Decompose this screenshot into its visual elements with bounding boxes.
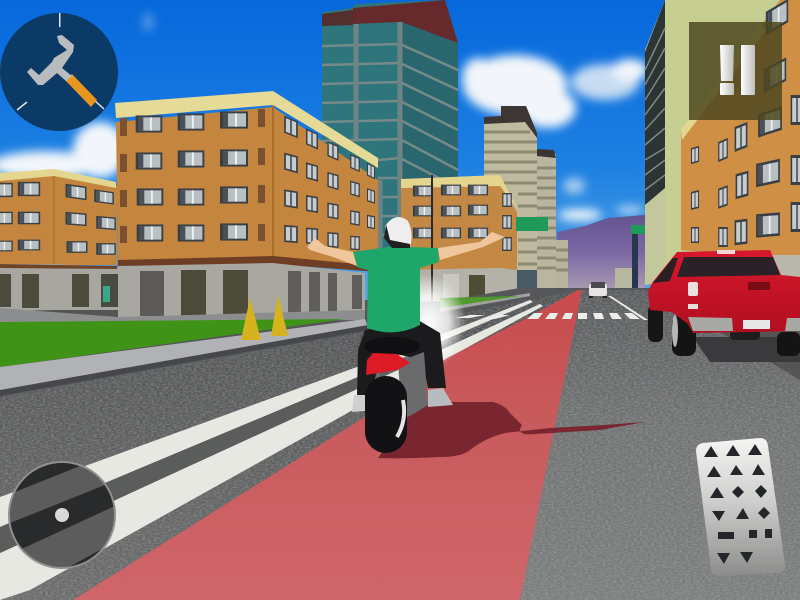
glass tower bbox=[322, 0, 458, 255]
sidewalk bbox=[0, 319, 368, 392]
grass lawn bbox=[0, 319, 345, 367]
road right bbox=[520, 290, 800, 600]
bike frame bbox=[398, 352, 428, 420]
sky bbox=[0, 0, 800, 300]
shoes bbox=[352, 395, 365, 412]
accelerator pedal bbox=[696, 438, 785, 576]
rider and motorbike bbox=[307, 217, 505, 453]
green shirt bbox=[353, 247, 439, 332]
road texture bbox=[0, 290, 800, 600]
traffic cones bbox=[241, 295, 288, 340]
clouds bbox=[0, 13, 648, 221]
pause button bbox=[689, 22, 782, 120]
steering joystick bbox=[8, 461, 116, 569]
white lane stripes bbox=[0, 300, 543, 600]
green street signs bbox=[516, 217, 658, 290]
red pickup truck bbox=[648, 250, 800, 362]
hammer button bbox=[0, 13, 118, 131]
white helmet bbox=[385, 217, 412, 247]
crosswalk bbox=[455, 296, 648, 320]
beige towers bbox=[484, 106, 568, 294]
distant white car bbox=[589, 282, 607, 298]
arms bbox=[307, 238, 357, 266]
building: main orange bbox=[115, 91, 378, 317]
bike shadow bbox=[378, 402, 645, 458]
seat bbox=[364, 337, 420, 355]
headlight glare bbox=[390, 274, 466, 370]
road left bbox=[0, 290, 580, 600]
building: centre orange bbox=[401, 175, 517, 302]
mountain bbox=[557, 215, 645, 290]
red bike lane bbox=[73, 290, 582, 600]
horizon ground bbox=[365, 288, 650, 320]
building: right orange bbox=[681, 0, 800, 280]
building: left orange bbox=[0, 169, 118, 311]
rear tyre bbox=[365, 376, 407, 453]
pavement behind grass bbox=[0, 308, 365, 323]
red fender bbox=[366, 353, 410, 375]
rider legs bbox=[357, 320, 446, 396]
building: right green tower bbox=[645, 0, 800, 285]
